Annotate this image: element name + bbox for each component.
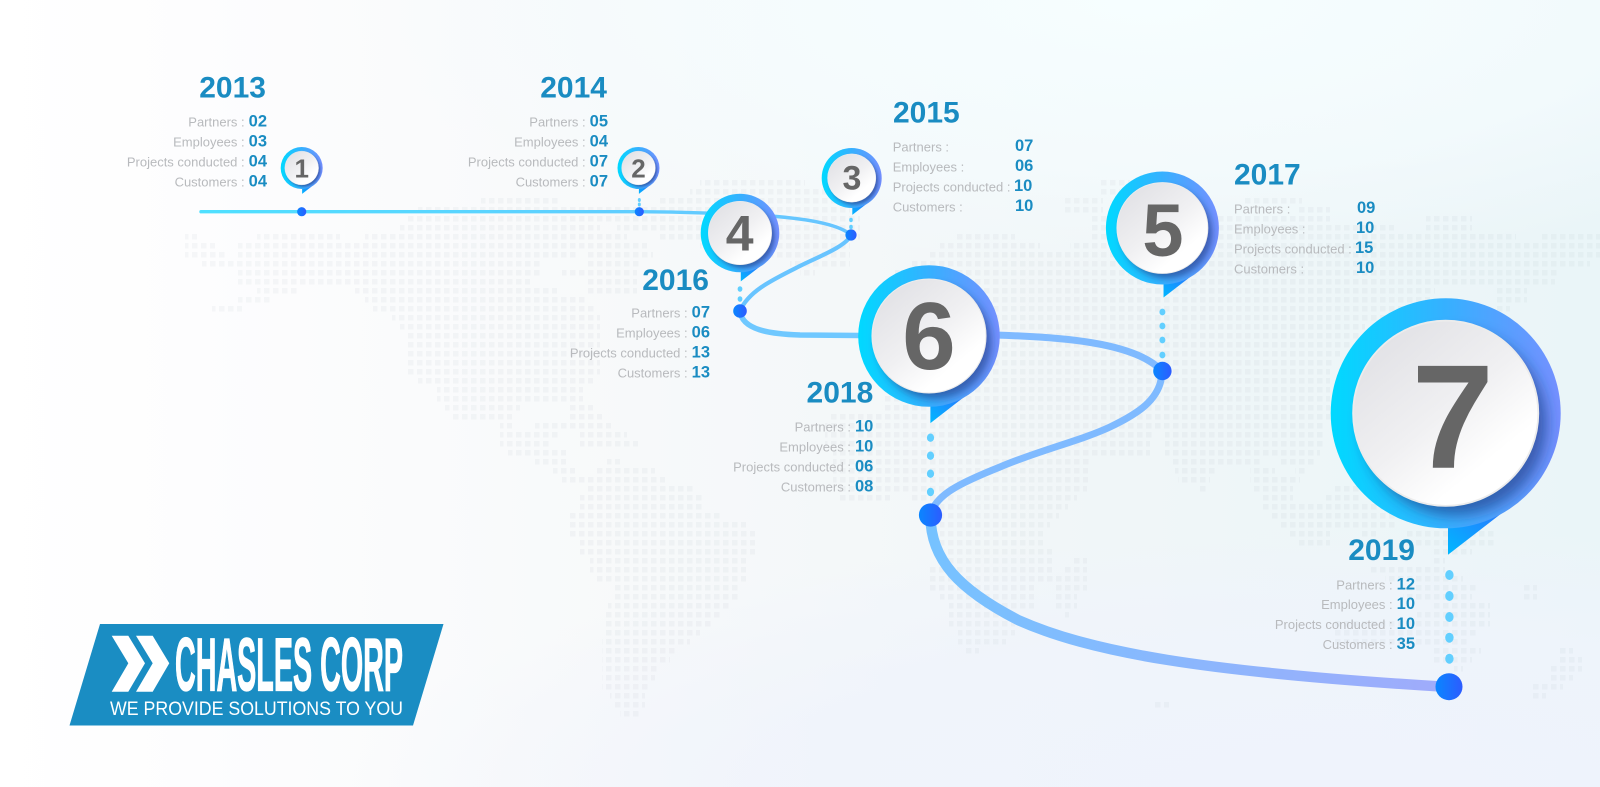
pin 3 (822, 148, 882, 215)
block: 2019: Partners :12 (1336, 575, 1415, 593)
pin 5 (1106, 172, 1219, 297)
pin 1 (281, 147, 323, 194)
block: 2016 (570, 264, 710, 382)
block: 2015 (893, 97, 1033, 215)
pin 2: 2 (631, 153, 646, 183)
block: 2019 (1275, 534, 1415, 653)
pin 5: 5 (1142, 189, 1184, 272)
block: 2019: Employees :10 (1321, 595, 1415, 613)
block: 2018: Employees :10 (779, 438, 873, 456)
block: 2014: Customers :07 (516, 173, 608, 191)
block: 2015: 10 (1015, 197, 1033, 215)
dotted world map (185, 180, 1600, 718)
block: 2015: Projects conducted : (893, 180, 1010, 195)
block: 2015: Customers : (893, 200, 963, 215)
block: 2013: 2013 (199, 72, 266, 105)
block: 2017: Projects conducted : (1234, 241, 1352, 256)
block: 2018 (733, 377, 873, 496)
block: 2016: Customers :13 (618, 364, 710, 382)
pin 1: 1 (294, 153, 309, 183)
logo: Chasles Corp: WE PROVIDE SOLUTIONS TO YOU (110, 699, 403, 720)
block: 2019: Projects conducted :10 (1275, 615, 1415, 633)
block: 2017: Partners : (1234, 201, 1290, 216)
block: 2014: Employees :04 (514, 133, 609, 151)
pin 2 (618, 147, 660, 194)
block: 2013: Partners :02 (188, 113, 267, 131)
block: 2018: Customers :08 (781, 478, 873, 496)
block: 2018: Partners :10 (795, 418, 873, 436)
pin 6 (858, 265, 1000, 423)
block: 2013 (127, 72, 268, 191)
timeline path (201, 212, 1449, 687)
block: 2016: Employees :06 (616, 324, 710, 342)
pin 6: 6 (902, 283, 956, 390)
block: 2017: 10 (1356, 259, 1374, 277)
block: 2014: 2014 (540, 72, 607, 105)
block: 2018: 2018 (807, 377, 873, 410)
block: 2015: 07 (1015, 137, 1033, 155)
block: 2017: 09 (1357, 199, 1375, 217)
pin 7 (1331, 298, 1561, 555)
block: 2017: 2017 (1234, 159, 1301, 192)
block: 2017: 15 (1355, 239, 1373, 257)
dotted connectors (638, 198, 1454, 664)
block: 2013: Employees :03 (173, 133, 267, 151)
block: 2016: Projects conducted :13 (570, 344, 710, 362)
block: 2015: 10 (1014, 177, 1032, 195)
block: 2017: 10 (1356, 219, 1374, 237)
block: 2017: Customers : (1234, 261, 1304, 276)
block: 2017: Employees : (1234, 221, 1306, 236)
timeline nodes (297, 207, 1463, 700)
pin 7: 7 (1412, 335, 1494, 500)
block: 2015: Employees : (893, 160, 964, 175)
block: 2014: Projects conducted :07 (468, 153, 608, 171)
pin 4: 4 (726, 206, 754, 262)
block: 2019: 2019 (1348, 534, 1415, 567)
block: 2015: 2015 (893, 97, 960, 130)
block: 2015: 06 (1015, 157, 1033, 175)
block: 2015: Partners : (893, 140, 949, 155)
block: 2013: Projects conducted :04 (127, 153, 268, 171)
logo: Chasles Corp (70, 623, 444, 726)
pin 3: 3 (843, 159, 861, 197)
block: 2013: Customers :04 (175, 173, 268, 191)
block: 2014 (468, 72, 609, 191)
block: 2017 (1234, 159, 1375, 277)
text: CHASLES CORP (175, 623, 403, 707)
pin 4 (701, 194, 779, 281)
block: 2019: Customers :35 (1323, 635, 1415, 653)
block: 2014: Partners :05 (529, 113, 608, 131)
block: 2016: 2016 (642, 264, 709, 297)
block: 2018: Projects conducted :06 (733, 458, 873, 476)
block: 2016: Partners :07 (631, 304, 710, 322)
